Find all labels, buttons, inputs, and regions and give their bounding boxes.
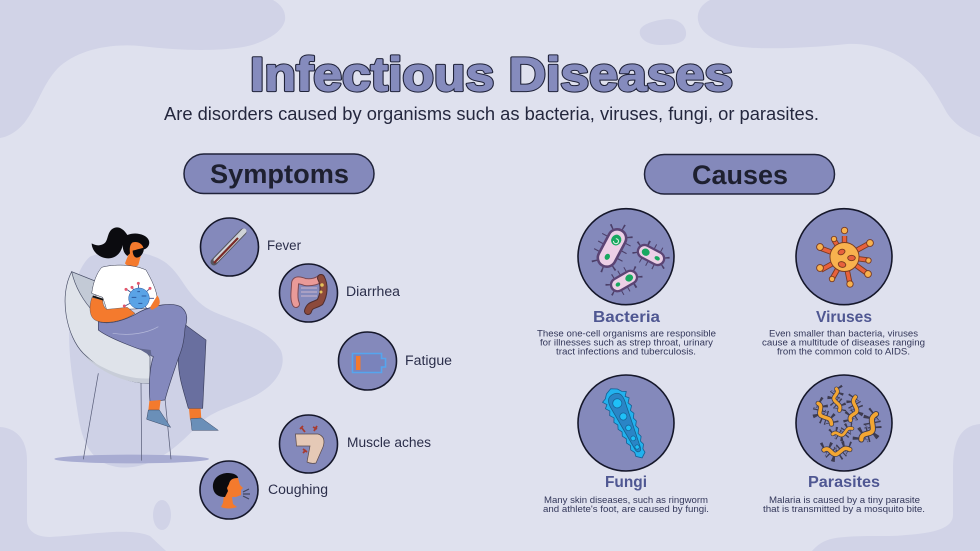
symptom: fatigue (338, 332, 452, 390)
description: parasites: Malaria is caused by a tiny parasite (769, 495, 920, 505)
icon: parasites (796, 375, 892, 471)
heading: viruses: Viruses (816, 309, 872, 326)
description: bacteria (537, 328, 716, 356)
description: parasites: that is transmitted by a mosquito bite. (763, 504, 925, 514)
cause: parasites (763, 375, 925, 514)
description: viruses (762, 328, 925, 356)
heading: parasites: Parasites (808, 474, 880, 491)
label: coughing: Coughing (268, 482, 328, 497)
heading: symptoms: Symptoms (210, 159, 349, 189)
cause: fungi (543, 375, 709, 514)
symptom: fever (200, 218, 301, 276)
description: fungi (543, 495, 709, 514)
icon: intestines (280, 264, 338, 322)
symptom: muscle aches (280, 415, 431, 473)
label: muscle aches: Muscle aches (347, 435, 431, 450)
description: bacteria: These one-cell organisms are responsible (537, 328, 716, 338)
heading: causes (644, 154, 834, 194)
description: fungi: and athlete's foot, are caused by fungi. (543, 504, 709, 514)
label: diarrhea: Diarrhea (346, 284, 401, 299)
illustration: woman on chair (54, 227, 283, 467)
label: fatigue: Fatigue (405, 353, 452, 368)
description: viruses: Even smaller than bacteria, viruses (769, 328, 919, 338)
symptom: coughing (200, 461, 328, 519)
heading: fungi: Fungi (605, 474, 647, 491)
description: viruses: cause a multitude of diseases ranging (762, 338, 925, 348)
heading: bacteria: Bacteria (593, 309, 660, 326)
symptom: diarrhea (280, 264, 401, 322)
description: fungi: Many skin diseases, such as ringworm (544, 495, 708, 505)
icon: thermometer (200, 218, 258, 276)
subtitle: Are disorders caused by organisms such as bacteria, viruses, fungi, or parasites. (164, 104, 819, 124)
icon: fungus (578, 375, 674, 471)
description: viruses: from the common cold to AIDS. (777, 346, 910, 356)
icon: low battery (338, 332, 396, 390)
description: parasites (763, 495, 925, 514)
cause: bacteria (537, 209, 716, 356)
heading: causes: Causes (692, 160, 788, 190)
icon: virus (796, 209, 892, 305)
heading: symptoms (184, 154, 374, 194)
title: Infectious Diseases (250, 48, 733, 100)
icon: bent arm (280, 415, 338, 473)
label: fever: Fever (267, 238, 301, 253)
title: Infectious Diseases (250, 48, 733, 100)
cause: viruses (762, 209, 925, 356)
description: bacteria: for illnesses such as strep throat, urinary (540, 338, 714, 348)
icon: coughing person (200, 461, 258, 519)
icon: bacteria (578, 209, 674, 305)
description: bacteria: tract infections and tuberculosis. (556, 346, 696, 356)
